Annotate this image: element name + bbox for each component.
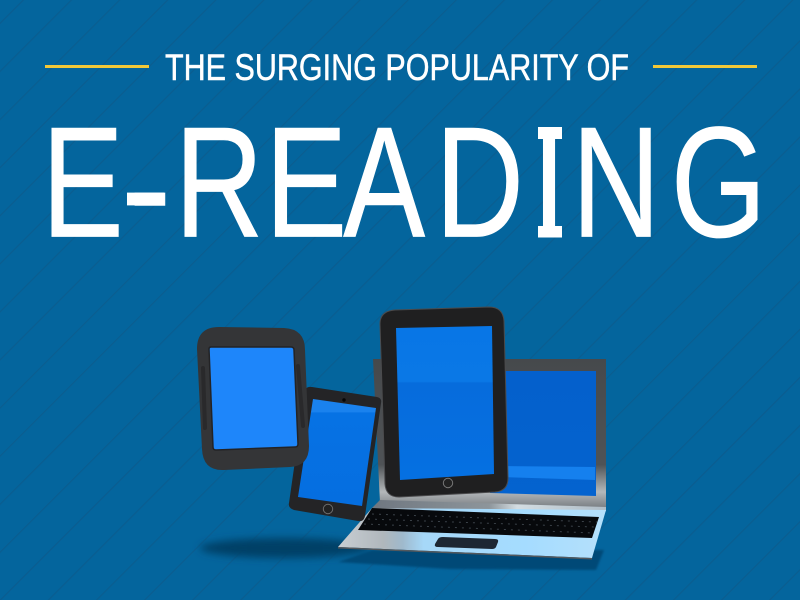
trackpad <box>435 537 498 549</box>
laptop lid <box>373 359 606 510</box>
rounded tablet screen <box>209 347 298 450</box>
rounded tablet <box>197 327 309 470</box>
large tablet home button <box>443 478 453 488</box>
phone home button <box>323 504 333 514</box>
laptop base <box>338 508 606 558</box>
laptop <box>338 359 606 560</box>
phone camera <box>342 398 346 402</box>
illustration: devices <box>197 307 606 570</box>
phone screen <box>298 399 376 506</box>
right yellow rule <box>653 65 757 68</box>
shadow under devices <box>200 538 604 570</box>
phone-size tablet <box>289 387 381 521</box>
laptop deck <box>372 500 606 517</box>
subtitle: THE SURGING POPULARITY OF <box>165 46 629 88</box>
title: E-READING <box>42 94 766 274</box>
laptop screen <box>490 371 596 496</box>
left yellow rule <box>45 65 149 68</box>
keyboard <box>358 508 599 538</box>
large tablet screen <box>396 326 494 480</box>
large tablet <box>380 307 508 497</box>
